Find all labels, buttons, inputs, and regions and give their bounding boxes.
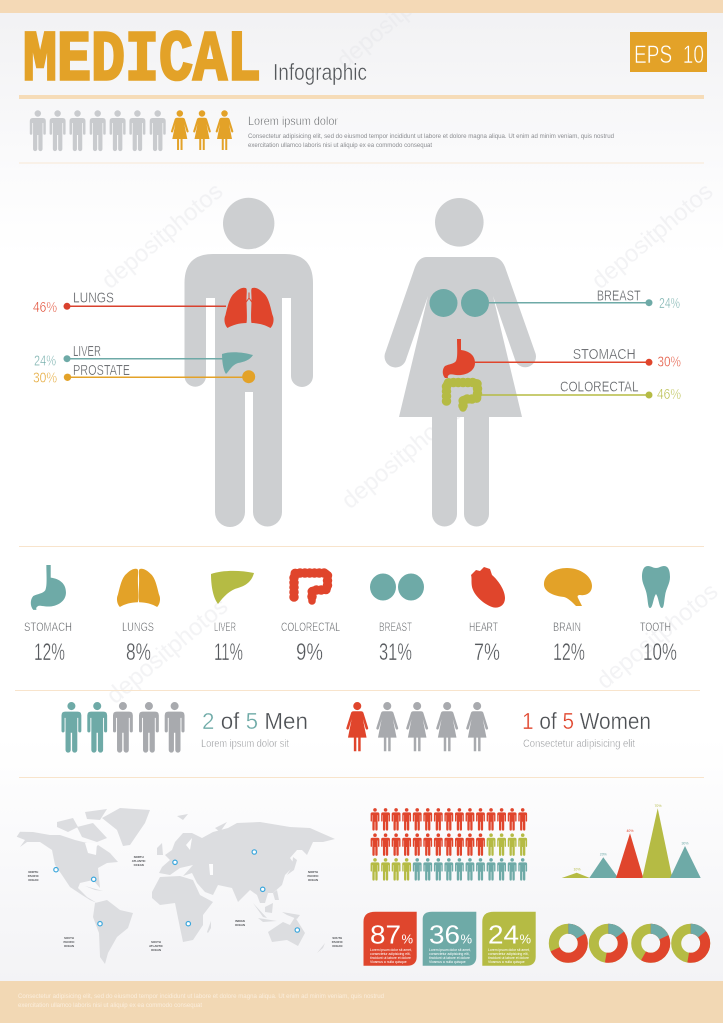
- callout: colorectal: 46%: [657, 386, 681, 403]
- stat: lungs: [117, 569, 160, 666]
- footer band: Consectetur adipisicing elit, sed do eiusmod tempor incididunt ut labore et dolore magna aliqua. Ut enim ad minim veniam, quis nostrud: [18, 993, 384, 1000]
- callout: stomach: 30%: [658, 354, 681, 371]
- ocean labels: OCEAN: [332, 944, 342, 948]
- subtitle: Infographic: [273, 59, 367, 85]
- ocean labels: OCEAN: [235, 923, 245, 927]
- callout: stomach: STOMACH: [573, 347, 636, 363]
- stat: colorectal: [281, 573, 340, 666]
- world map: [17, 808, 343, 964]
- stat card: 36%: %: [460, 931, 472, 946]
- organ: lungs: [224, 288, 274, 328]
- panel: female figure: [385, 198, 536, 526]
- panel: 1 of 5 women: [346, 702, 651, 751]
- pictogram: women: [346, 702, 488, 751]
- footer band: [0, 981, 723, 1023]
- stat card: 36%: consectetur adipisicing elit,: [429, 952, 470, 956]
- watermark: depositphotos: [587, 178, 718, 295]
- stat: brain: 12%: [553, 639, 585, 666]
- triangle chart: 10%: [573, 868, 581, 872]
- ocean labels: OCEAN: [134, 863, 144, 867]
- watermark: depositphotos: [592, 578, 723, 695]
- organ: breast: [430, 289, 489, 317]
- stat: breast: 31%: [379, 639, 412, 666]
- header text block: [248, 114, 614, 149]
- stat card: 24%: [482, 912, 536, 966]
- stat: breast: BREAST: [379, 622, 412, 634]
- footer band: exercitation ullamco laboris nisi ut aliquip ex ea commodo consequat: [18, 1002, 202, 1009]
- callout: colorectal: COLORECTAL: [560, 380, 638, 396]
- stat card: 24%: Lorem ipsum dolor sit amet,: [488, 948, 530, 952]
- callout: prostate: PROSTATE: [73, 363, 130, 379]
- stat card: 24%: consectetur adipisicing elit,: [488, 952, 529, 956]
- badge: EPS 10: [630, 32, 707, 72]
- header rule: [19, 95, 704, 99]
- callout: prostate: 30%: [33, 370, 57, 387]
- stat: tooth: [640, 566, 677, 666]
- triangle chart: 30%: [681, 842, 689, 846]
- stat card: 87%: [364, 912, 417, 966]
- donut 4: [676, 929, 705, 958]
- ocean labels: ATLANTIC: [132, 859, 146, 863]
- stat card: 24%: %: [520, 931, 532, 946]
- stat: brain: [544, 568, 592, 666]
- ocean labels: NORTH: [308, 870, 318, 874]
- stat: tooth: TOOTH: [640, 622, 671, 634]
- stat: lungs: 8%: [126, 639, 151, 666]
- header text block: exercitation ullamco laboris nisi ut aliquip ex ea commodo consequat: [248, 142, 432, 149]
- ocean labels: OCEAN: [28, 878, 38, 882]
- ocean labels: PACIFIC: [308, 874, 318, 878]
- ocean labels: PACIFIC: [28, 874, 39, 878]
- organ: liver: [222, 352, 253, 374]
- callout: prostate: [33, 363, 245, 387]
- stat: stomach: 12%: [34, 639, 65, 666]
- stat: heart: 7%: [474, 639, 500, 666]
- triangle chart: [562, 804, 701, 878]
- ocean labels: OCEAN: [151, 948, 161, 952]
- callout: breast: [489, 289, 680, 312]
- callout: liver: 24%: [34, 353, 56, 370]
- pictogram: men: [62, 702, 185, 753]
- stat card: 24%: 24: [488, 919, 519, 949]
- panel: 2 of 5 men: [62, 702, 308, 753]
- ocean labels: SOUTH: [151, 940, 161, 944]
- triangle chart: 40%: [626, 829, 634, 833]
- badge: EPS 10: EPS 10: [634, 41, 704, 69]
- stat card: 87%: Vivamus a nulla quisque: [370, 960, 407, 964]
- watermark: [97, 0, 723, 710]
- stat card: 87%: tincidunt ut labore et dolore: [370, 956, 411, 960]
- stat card: 24%: Vivamus a nulla quisque: [488, 960, 525, 964]
- stat card: 87%: consectetur adipisicing elit,: [370, 952, 411, 956]
- stat card: 36%: [423, 912, 476, 966]
- triangle chart: 20%: [600, 852, 607, 856]
- header text block: Consectetur adipisicing elit, sed do eiusmod tempor incididunt ut labore et dolore magna aliqua. Ut enim ad minim veniam, quis nostrud: [248, 133, 614, 140]
- panel: organ statistics: [24, 565, 677, 666]
- callout: lungs: LUNGS: [73, 291, 114, 307]
- map markers: [54, 850, 299, 932]
- stat: colorectal: 9%: [296, 639, 323, 666]
- ocean labels: OCEAN: [64, 944, 74, 948]
- callout: breast: 24%: [659, 295, 680, 312]
- donut charts: [554, 929, 705, 958]
- callout: colorectal: [481, 380, 681, 403]
- ocean labels: SOUTH: [332, 936, 342, 940]
- stat: liver: [211, 571, 254, 666]
- organ: colon: [446, 382, 478, 408]
- stat card: 36%: Vivamus a nulla quisque: [429, 960, 466, 964]
- watermark: depositphotos: [102, 593, 233, 710]
- ocean labels: SOUTH: [64, 936, 74, 940]
- donut 3: [636, 929, 665, 958]
- man silhouette: [184, 198, 313, 527]
- stat card: 36%: 36: [429, 919, 460, 949]
- people grid: [371, 808, 527, 881]
- ocean labels: [28, 855, 343, 952]
- stat: lungs: LUNGS: [122, 622, 154, 634]
- panel: 1 of 5 women: 1 of 5 Women: [522, 708, 651, 734]
- woman silhouette: [385, 198, 536, 526]
- panel: 2 of 5 men: Lorem ipsum dolor sit: [201, 738, 289, 750]
- ocean labels: PACIFIC: [332, 940, 343, 944]
- stat: brain: BRAIN: [553, 622, 581, 634]
- organ: stomach: [443, 339, 475, 378]
- callout: stomach: [474, 347, 681, 371]
- ocean labels: INDIAN: [235, 919, 245, 923]
- top band: [0, 0, 723, 13]
- stat: heart: HEART: [469, 622, 498, 634]
- icon row: men and women: [30, 110, 233, 151]
- stat card: 87%: %: [402, 931, 414, 946]
- stat: liver: 11%: [214, 639, 243, 666]
- triangle chart: 70%: [654, 804, 662, 808]
- title: MEDICAL: [23, 22, 261, 102]
- panel: 2 of 5 men: 2 of 5 Men: [202, 708, 308, 734]
- stat: stomach: STOMACH: [24, 622, 72, 634]
- callout: breast: BREAST: [597, 289, 641, 305]
- stat card: 87%: Lorem ipsum dolor sit amet,: [370, 948, 412, 952]
- panel: 1 of 5 women: Consectetur adipisicing elit: [523, 738, 635, 750]
- stat: liver: LIVER: [214, 622, 236, 634]
- stat card: 24%: tincidunt ut labore et dolore: [488, 956, 529, 960]
- organ: prostate: [242, 370, 255, 383]
- callout: lungs: 46%: [33, 299, 57, 316]
- ocean labels: NORTH: [28, 870, 38, 874]
- stat: breast: [370, 574, 424, 666]
- ocean labels: NORTH: [134, 855, 144, 859]
- stat: heart: [469, 567, 505, 666]
- ocean labels: ATLANTIC: [149, 944, 163, 948]
- watermark: depositphotos: [97, 178, 228, 295]
- ocean labels: OCEAN: [308, 878, 318, 882]
- donut 2: [594, 929, 623, 958]
- stat card: 36%: Lorem ipsum dolor sit amet,: [429, 948, 471, 952]
- stat card: 87%: 87: [370, 919, 401, 949]
- stat card: 36%: tincidunt ut labore et dolore: [429, 956, 470, 960]
- stat: colorectal: COLORECTAL: [281, 622, 340, 634]
- ocean labels: PACIFIC: [64, 940, 74, 944]
- donut 1: [554, 929, 583, 958]
- header text block: Lorem ipsum dolor: [248, 114, 338, 128]
- callout: liver: LIVER: [73, 344, 101, 360]
- callout: lungs: [33, 291, 226, 316]
- panel: male figure: [184, 198, 313, 527]
- watermark: depositphotos: [337, 398, 468, 515]
- stat: tooth: 10%: [643, 639, 677, 666]
- stat: stomach: [24, 565, 72, 666]
- callout: liver: [34, 344, 223, 370]
